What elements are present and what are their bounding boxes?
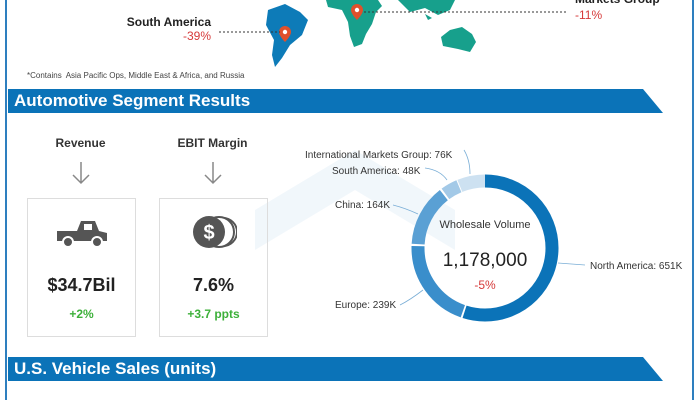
label: South America: -39%	[183, 29, 211, 43]
label: South America	[127, 15, 212, 43]
heading: U.S. Vehicle Sales	[8, 357, 663, 381]
map: Africa	[326, 0, 382, 47]
panel: EBIT margin	[159, 136, 268, 337]
pin: South America	[279, 26, 291, 42]
map: South America	[266, 4, 308, 67]
label: International Markets Group: -11%	[575, 8, 602, 22]
donut chart: wholesale volume: China: 164K	[335, 200, 390, 211]
donut chart: wholesale volume: Europe: 239K	[335, 300, 396, 311]
donut chart: wholesale volume: International Markets Group: 76K	[305, 150, 453, 161]
watermark	[255, 150, 455, 250]
donut chart: wholesale volume: Wholesale Volume	[439, 219, 531, 231]
heading: Automotive Segment Results: Automotive Segment Results	[14, 91, 250, 110]
label: International Markets Group	[575, 0, 660, 22]
text: +2%	[69, 307, 94, 321]
map: Australia	[441, 27, 476, 52]
icon: coins: $	[203, 222, 214, 244]
arrow: revenue	[72, 162, 90, 184]
dotted connectors	[219, 12, 566, 32]
text: +3.7 ppts	[187, 307, 240, 321]
footnote: *Contains Asia Pacific Ops, Middle East & Africa, and Russia	[27, 71, 244, 80]
label: South America: South America	[127, 15, 211, 29]
page borders	[5, 0, 7, 400]
panel: revenue	[27, 136, 136, 337]
icon: coins	[193, 216, 237, 248]
arrow: EBIT	[204, 162, 222, 184]
donut chart: wholesale volume: -5%	[474, 278, 496, 292]
text: EBIT Margin	[177, 136, 248, 150]
donut chart: wholesale volume: 1,178,000	[443, 250, 527, 271]
donut chart: wholesale volume: South America: 48K	[332, 166, 421, 177]
donut chart: wholesale volume: North America: 651K	[590, 261, 683, 272]
text: Revenue	[55, 136, 106, 150]
world map	[219, 0, 566, 67]
text: 7.6%	[193, 275, 234, 295]
pin: Africa	[351, 4, 363, 20]
text: $34.7Bil	[47, 275, 116, 295]
map: Asia	[398, 0, 455, 20]
heading: Automotive Segment Results	[8, 89, 663, 113]
heading: U.S. Vehicle Sales: U.S. Vehicle Sales (units)	[14, 359, 216, 378]
icon: truck	[57, 221, 107, 246]
